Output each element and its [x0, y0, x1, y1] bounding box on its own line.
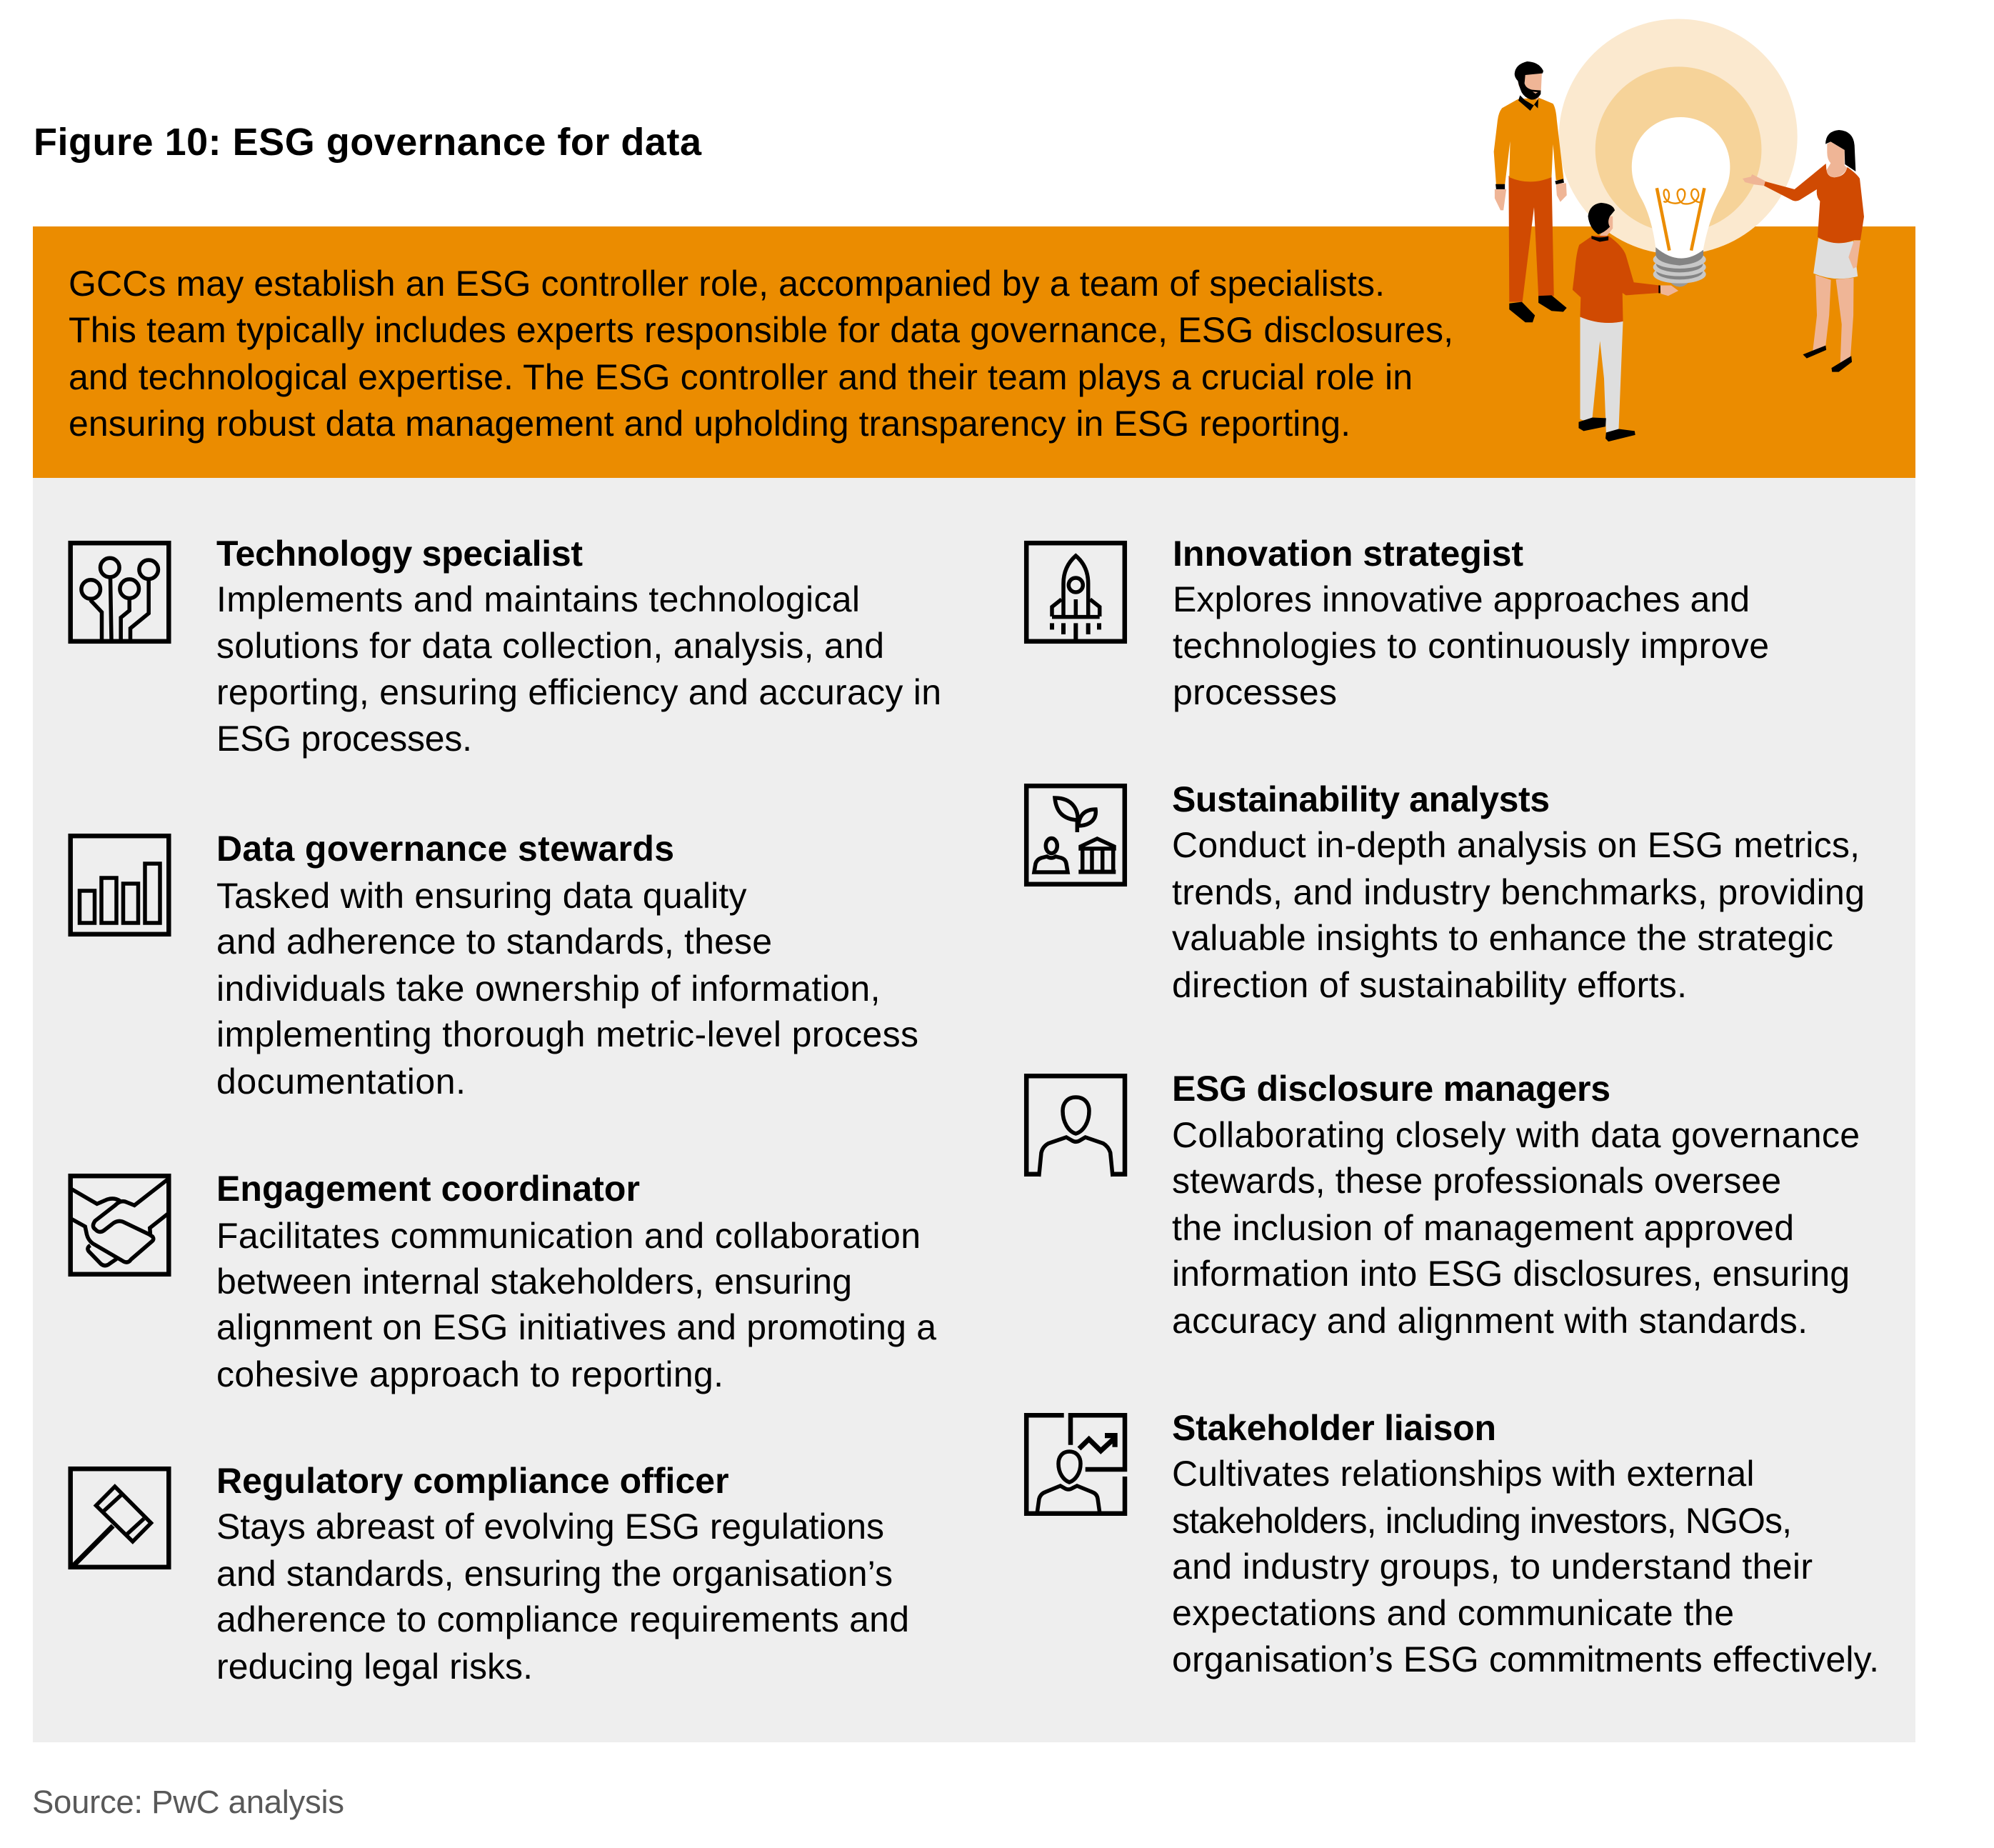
icon: gavel — [71, 1469, 169, 1567]
bulb screw base — [1653, 247, 1706, 287]
item: Data governance stewards: Data governance stewards — [216, 829, 674, 869]
intro text: ensuring robust data management and upholding transparency in ESG reporting. — [69, 404, 1351, 444]
item: Regulatory compliance officer: Stays abreast of evolving ESG regulations — [216, 1507, 884, 1547]
item: ESG disclosure managers: the inclusion of management approved — [1172, 1208, 1794, 1248]
item: Technology specialist: Technology specialist — [216, 534, 583, 574]
icon: stakeholder with chart — [1026, 1415, 1125, 1514]
source note: Source: PwC analysis — [32, 1784, 344, 1820]
item: Innovation strategist: Explores innovative approaches and — [1173, 579, 1750, 619]
item: Technology specialist: reporting, ensuring efficiency and accuracy in — [216, 672, 941, 712]
item: Stakeholder liaison: and industry groups, to understand their — [1172, 1547, 1813, 1587]
item: Data governance stewards: and adherence to standards, these — [216, 921, 772, 962]
person: man holding bulb — [1573, 203, 1678, 441]
person: bearded man — [1494, 61, 1567, 322]
item: Stakeholder liaison — [1172, 1408, 1879, 1679]
intro text: This team typically includes experts responsible for data governance, ESG disclosures, — [69, 310, 1453, 350]
item: Stakeholder liaison: Stakeholder liaison — [1172, 1408, 1496, 1448]
item: Technology specialist: ESG processes. — [216, 719, 472, 759]
item: Sustainability analysts: trends, and industry benchmarks, providing — [1172, 872, 1865, 912]
item: Data governance stewards: Tasked with ensuring data quality — [216, 876, 747, 916]
item: Regulatory compliance officer — [216, 1461, 909, 1687]
item: Innovation strategist: Innovation strategist — [1173, 534, 1523, 574]
item: Technology specialist: Implements and maintains technological — [216, 579, 860, 619]
panel: intro banner — [33, 226, 1915, 478]
icon: handshake — [71, 1176, 169, 1274]
item: Engagement coordinator: Engagement coordinator — [216, 1169, 640, 1209]
item: ESG disclosure managers: information into ESG disclosures, ensuring — [1172, 1254, 1850, 1294]
item: ESG disclosure managers: accuracy and alignment with standards. — [1172, 1301, 1808, 1341]
item: Regulatory compliance officer: adherence to compliance requirements and — [216, 1599, 909, 1639]
item: Sustainability analysts: valuable insights to enhance the strategic — [1172, 918, 1833, 958]
item: Stakeholder liaison: organisation’s ESG commitments effectively. — [1172, 1639, 1879, 1679]
item: ESG disclosure managers: ESG disclosure managers — [1172, 1069, 1610, 1109]
item: Sustainability analysts — [1172, 779, 1865, 1005]
item: Regulatory compliance officer: reducing legal risks. — [216, 1647, 533, 1687]
item: Regulatory compliance officer: and standards, ensuring the organisation’s — [216, 1554, 893, 1594]
item: Stakeholder liaison: stakeholders, including investors, NGOs, — [1172, 1501, 1792, 1541]
filament coil — [1663, 189, 1700, 204]
icon: person — [1026, 1076, 1125, 1177]
woman upper body — [1743, 130, 1864, 269]
light bulb — [1632, 117, 1730, 287]
item: Sustainability analysts: Sustainability analysts — [1172, 779, 1550, 819]
item: Stakeholder liaison: expectations and communicate the — [1172, 1593, 1734, 1633]
item: Engagement coordinator: cohesive approach to reporting. — [216, 1354, 723, 1394]
item: Innovation strategist: technologies to continuously improve — [1173, 626, 1769, 666]
item: Sustainability analysts: Conduct in-depth analysis on ESG metrics, — [1172, 825, 1860, 865]
intro text: and technological expertise. The ESG controller and their team plays a crucial role in — [69, 357, 1413, 397]
item: Data governance stewards: implementing thorough metric-level process — [216, 1014, 918, 1054]
intro text — [69, 264, 1453, 444]
bearded man head — [1515, 61, 1543, 111]
item: Stakeholder liaison: Cultivates relationships with external — [1172, 1454, 1754, 1494]
icon: rocket — [1026, 543, 1125, 641]
person: woman gesturing — [1743, 130, 1864, 372]
item: Sustainability analysts: direction of sustainability efforts. — [1172, 965, 1687, 1005]
illustration: three people around a light bulb — [1494, 19, 1864, 441]
item: Data governance stewards: individuals take ownership of information, — [216, 969, 880, 1009]
item: Engagement coordinator: between internal stakeholders, ensuring — [216, 1262, 852, 1302]
icon: technology circuit — [71, 543, 169, 641]
item: ESG disclosure managers: stewards, these professionals oversee — [1172, 1161, 1781, 1201]
item: Innovation strategist — [1173, 534, 1769, 712]
item: Regulatory compliance officer: Regulatory compliance officer — [216, 1461, 729, 1501]
item: Engagement coordinator — [216, 1169, 936, 1394]
icon: sustainability plant, person and bank — [1026, 786, 1125, 884]
item: Engagement coordinator: Facilitates communication and collaboration — [216, 1216, 921, 1256]
item: ESG disclosure managers: Collaborating closely with data governance — [1172, 1115, 1860, 1155]
glow circles — [1559, 19, 1798, 254]
item: Data governance stewards: documentation. — [216, 1062, 466, 1102]
panel: content background — [33, 478, 1915, 1742]
title: Figure 10: ESG governance for data — [34, 121, 702, 164]
item: Technology specialist: solutions for data collection, analysis, and — [216, 626, 884, 666]
item: ESG disclosure managers — [1172, 1069, 1860, 1341]
intro text: GCCs may establish an ESG controller role, accompanied by a team of specialists. — [69, 264, 1385, 304]
icon: bar chart — [71, 836, 169, 934]
item: Innovation strategist: processes — [1173, 672, 1337, 712]
bulb glass and filament — [1632, 117, 1730, 259]
item: Engagement coordinator: alignment on ESG initiatives and promoting a — [216, 1307, 936, 1347]
item: Data governance stewards — [216, 829, 918, 1102]
item: Technology specialist — [216, 534, 941, 759]
